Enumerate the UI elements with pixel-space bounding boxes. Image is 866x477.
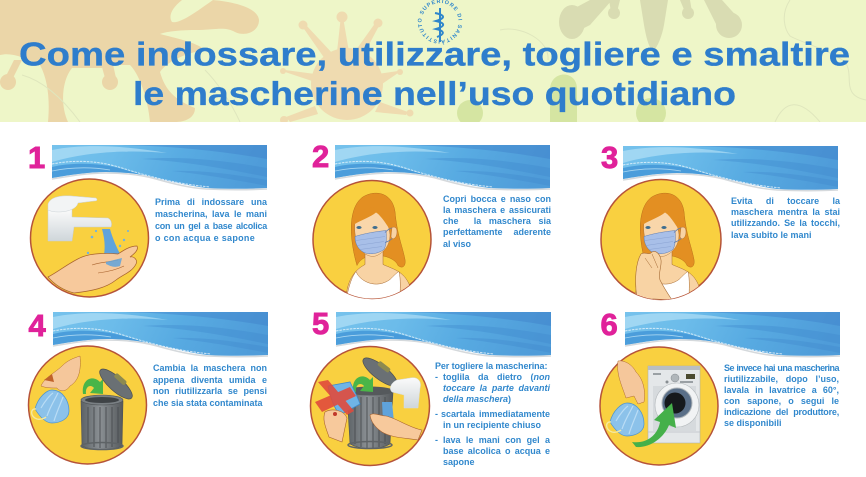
text: step 2: al viso <box>443 239 471 249</box>
step number 3: 3 <box>601 140 618 175</box>
text: step 5: - <box>435 372 438 382</box>
icon: remove mask, bin and washing hands <box>310 346 430 466</box>
text: step 5: della maschera) <box>443 394 511 404</box>
panel: step 5 removing the mask <box>310 306 551 467</box>
text: step 5: scartala immediatamente <box>441 408 550 418</box>
wave banner <box>623 146 838 191</box>
text: step 3 <box>731 196 840 240</box>
panel: step 2 cover mouth and nose <box>312 139 552 300</box>
text: step 5: toglila da dietro (non <box>443 372 550 382</box>
wave banner <box>53 312 268 357</box>
text: step 4: appena diventa umida e <box>153 375 267 385</box>
icon: discarding mask in bin <box>28 346 146 464</box>
text: step 6 <box>724 362 840 428</box>
step number 5: 5 <box>312 306 329 341</box>
text: step 3: utilizzando. Se la tocchi, <box>731 218 840 228</box>
text: step 6: Se invece hai una mascherina <box>724 362 839 372</box>
header banner <box>0 0 866 122</box>
text: step 3: Evita di toccare la <box>731 196 840 206</box>
text: step 2: Copri bocca e naso con <box>443 194 551 204</box>
text: step 3: maschera mentra la stai <box>731 207 840 217</box>
text: step 6: lavala in lavatrice a 60°, <box>724 384 839 394</box>
text: step 5: toccare la parte davanti <box>443 382 550 392</box>
text: step 4: Cambia la maschera non <box>153 363 267 373</box>
virus background pattern <box>0 0 866 122</box>
icon: washing hands under faucet <box>30 179 148 297</box>
wave banner <box>625 312 840 357</box>
text: step 6: con sapone, o segui le <box>724 396 839 406</box>
text: step 5: sapone <box>443 456 475 466</box>
text: step 3: lava subito le mani <box>731 230 812 240</box>
text: step 5 <box>435 360 550 467</box>
panel: step 6 washing machine <box>599 307 840 466</box>
text: step 6: riutilizzabile, dopo l’uso, <box>724 374 839 384</box>
panel: step 4 replace mask <box>28 308 268 465</box>
text: step 2: che la maschera sia <box>443 216 551 226</box>
text: step 5: - <box>435 434 438 444</box>
text: step 5: - <box>435 408 438 418</box>
icon: woman wearing mask <box>313 180 431 302</box>
text: step 4: che sia stata contaminata <box>153 398 263 408</box>
text: step 1: Prima di indossare una <box>155 197 267 207</box>
text: step 1: o con acqua e sapone <box>155 233 255 243</box>
text: step 5: base alcolica o acqua e <box>443 446 550 456</box>
text: step 2 <box>443 194 552 249</box>
wave banner <box>336 312 551 357</box>
text: step 1: mascherina, lava le mani <box>155 209 267 219</box>
text: step 6: indicazione del produttore, <box>724 406 839 416</box>
step number 2: 2 <box>312 139 329 174</box>
title <box>19 36 850 113</box>
title: Come indossare, utilizzare, togliere e smaltire <box>19 36 850 74</box>
text: step 5: in un recipiente chiuso <box>443 420 541 430</box>
wave banner <box>335 145 550 190</box>
text: step 6: se disponibili <box>724 418 782 428</box>
text: step 1 <box>155 197 268 243</box>
text: step 5: lava le mani con gel a <box>443 434 550 444</box>
step number 1: 1 <box>28 140 45 175</box>
text: step 4 <box>153 363 267 408</box>
text: step 4: non riutilizzarla se pensi <box>153 386 267 396</box>
panel: step 1 wash hands <box>28 140 268 298</box>
text: step 1: con un gel a base alcolica <box>155 221 267 231</box>
text: step 5: Per togliere la mascherina: <box>435 360 547 370</box>
panel: step 3 do not touch mask <box>600 140 840 300</box>
icon: mask and washing machine <box>600 347 718 465</box>
wave banner <box>52 145 267 190</box>
step number 6: 6 <box>600 307 618 342</box>
step number 4: 4 <box>28 308 46 343</box>
logo: Istituto Superiore di Sanità seal: ISTITUTO SUPERIORE DI SANITÀ <box>418 0 462 45</box>
title: le mascherine nell’uso quotidiano <box>133 76 736 113</box>
icon: woman touching mask <box>601 180 721 302</box>
text: step 2: la maschera e assicurati <box>443 205 551 215</box>
text: step 2: perfettamente aderente <box>443 227 551 237</box>
